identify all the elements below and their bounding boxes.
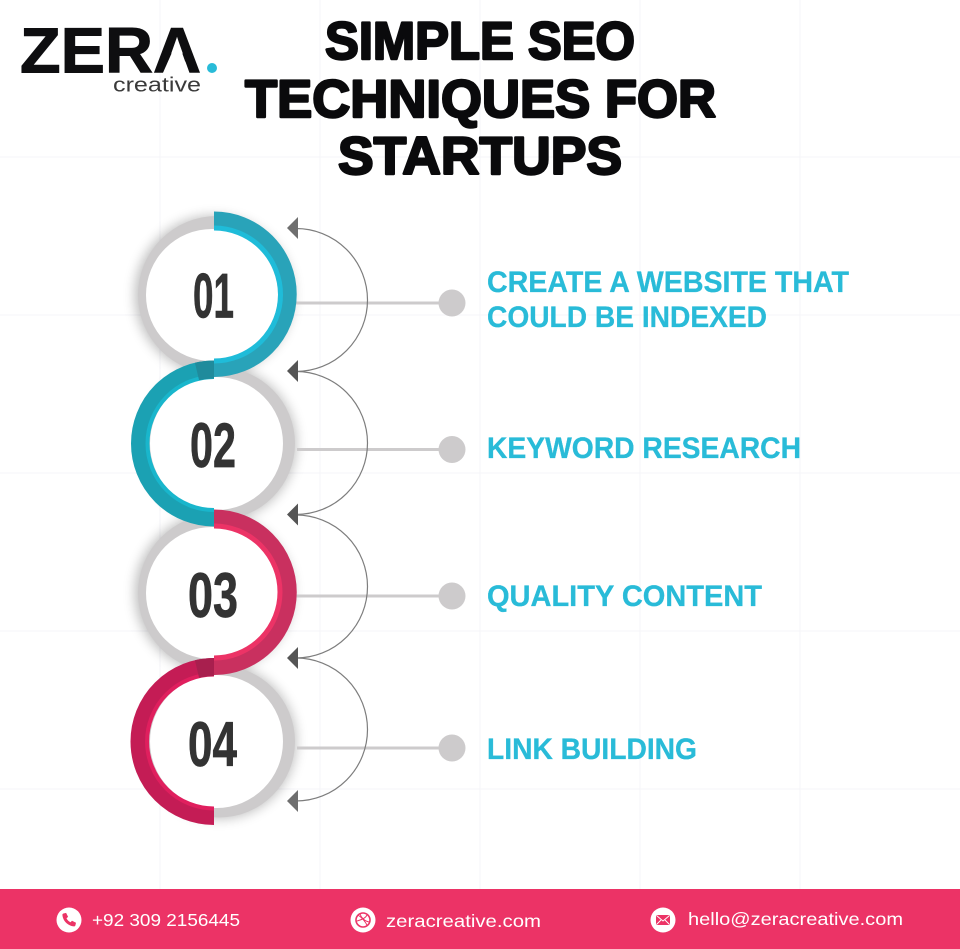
logo: ZERA creative: ZERA [20, 14, 201, 86]
contact: website: zeracreative.com [386, 911, 541, 931]
step numbers: 02 [190, 411, 236, 481]
logo: ZERA creative: creative [113, 74, 201, 96]
step numbers [188, 262, 238, 780]
contact: email [650, 908, 903, 932]
step labels: KEYWORD RESEARCH [487, 432, 801, 465]
step labels: CREATE A WEBSITE THAT [487, 266, 849, 299]
title: TECHNIQUES FOR [245, 70, 716, 129]
step numbers: 01 [193, 262, 234, 332]
footer band [0, 889, 960, 949]
connector 4 [297, 734, 466, 762]
step labels: QUALITY CONTENT [487, 580, 762, 613]
contact: email: hello@zeracreative.com [688, 909, 903, 929]
step numbers: 03 [188, 561, 238, 631]
step labels: COULD BE INDEXED [487, 301, 767, 334]
contact: phone [56, 908, 240, 932]
connector 1 [296, 290, 466, 316]
title [245, 12, 716, 186]
ring segment 4: crimson [140, 667, 214, 816]
title: STARTUPS [338, 127, 622, 186]
step numbers: 04 [188, 710, 237, 780]
ring segment 2: teal [140, 370, 214, 518]
ring segment 3: pink [214, 518, 288, 666]
contact: website [350, 908, 541, 932]
title: SIMPLE SEO [325, 12, 635, 71]
arrow heads [287, 217, 298, 812]
contact: phone: +92 309 2156445 [92, 910, 240, 930]
ring segment 1: teal [214, 220, 288, 368]
arrows: curved loops [296, 228, 368, 801]
circle backings with shadow [135, 216, 296, 818]
step labels: LINK BUILDING [487, 733, 697, 766]
connector 3 [296, 582, 466, 610]
connector 2 [297, 436, 466, 463]
step labels [487, 266, 849, 766]
